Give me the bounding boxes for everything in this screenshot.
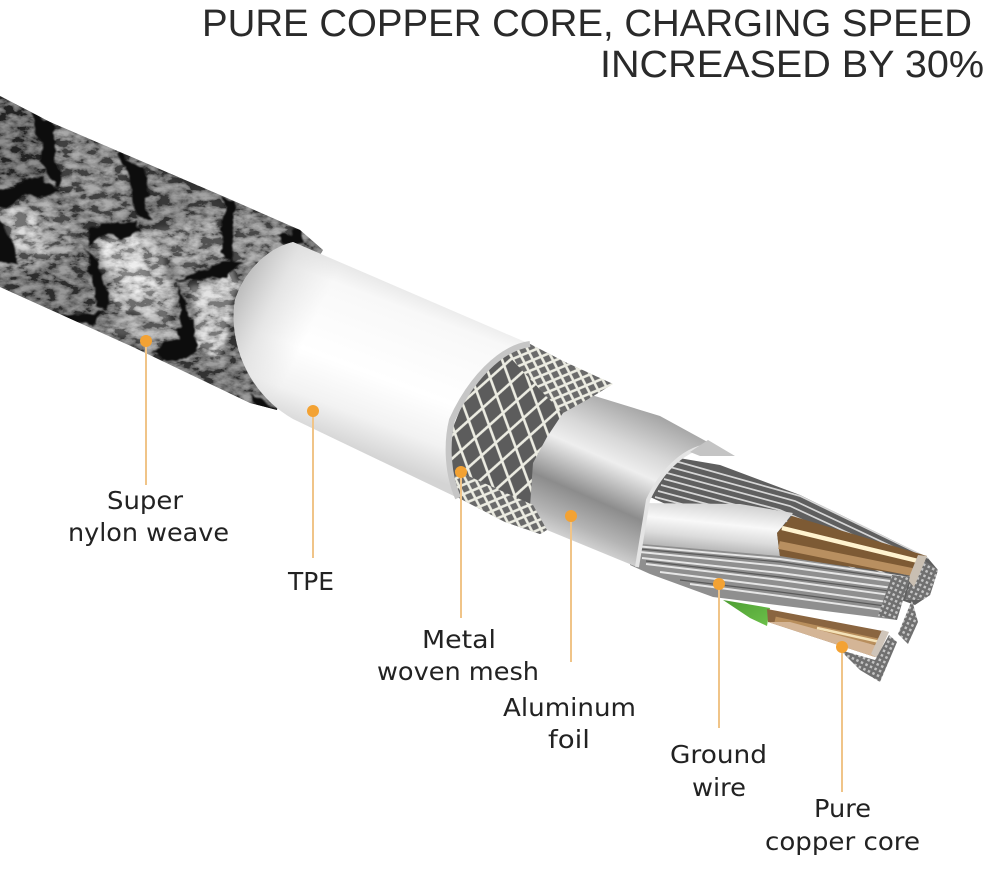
TPE jacket: [234, 242, 530, 498]
label: metal woven mesh: [377, 466, 539, 686]
cable illustration: [0, 90, 950, 682]
label: pure copper core: Pure: [814, 794, 871, 823]
label: TPE: TPE: [287, 567, 334, 596]
label: super nylon weave: Super: [107, 486, 184, 515]
copper core upper: [777, 516, 927, 587]
strand ends behind ground wire: [898, 600, 918, 644]
braid dark seams: [0, 108, 302, 412]
label: pure copper core: copper core: [765, 827, 920, 856]
ground wire: [630, 544, 910, 620]
braided nylon sleeve: [0, 90, 330, 420]
lower stranded wire end: [840, 635, 897, 682]
label: pure copper core: [765, 641, 920, 856]
title: INCREASED BY 30%: [600, 44, 984, 86]
label: super nylon weave: [68, 335, 229, 547]
label: aluminum foil: foil: [548, 725, 590, 754]
foil cut rim: [637, 445, 713, 567]
copper core lower: [767, 609, 889, 658]
label: ground wire: Ground: [670, 740, 767, 769]
aluminum foil layer: [525, 393, 713, 567]
label: TPE: [287, 405, 334, 596]
green insulation: [723, 600, 770, 626]
label: ground wire: wire: [692, 773, 746, 802]
label: metal woven mesh: Metal: [422, 625, 496, 654]
metal woven mesh: [452, 344, 613, 534]
label: ground wire: [670, 578, 767, 802]
label: aluminum foil: Aluminum: [503, 693, 636, 722]
upper stranded wire: [652, 458, 938, 605]
label: aluminum foil: [503, 510, 636, 754]
title: PURE COPPER CORE, CHARGING SPEED: [202, 3, 972, 45]
label: metal woven mesh: woven mesh: [377, 657, 539, 686]
label: super nylon weave: nylon weave: [68, 518, 229, 547]
white insulated wire: [630, 503, 793, 557]
title: [202, 3, 984, 86]
